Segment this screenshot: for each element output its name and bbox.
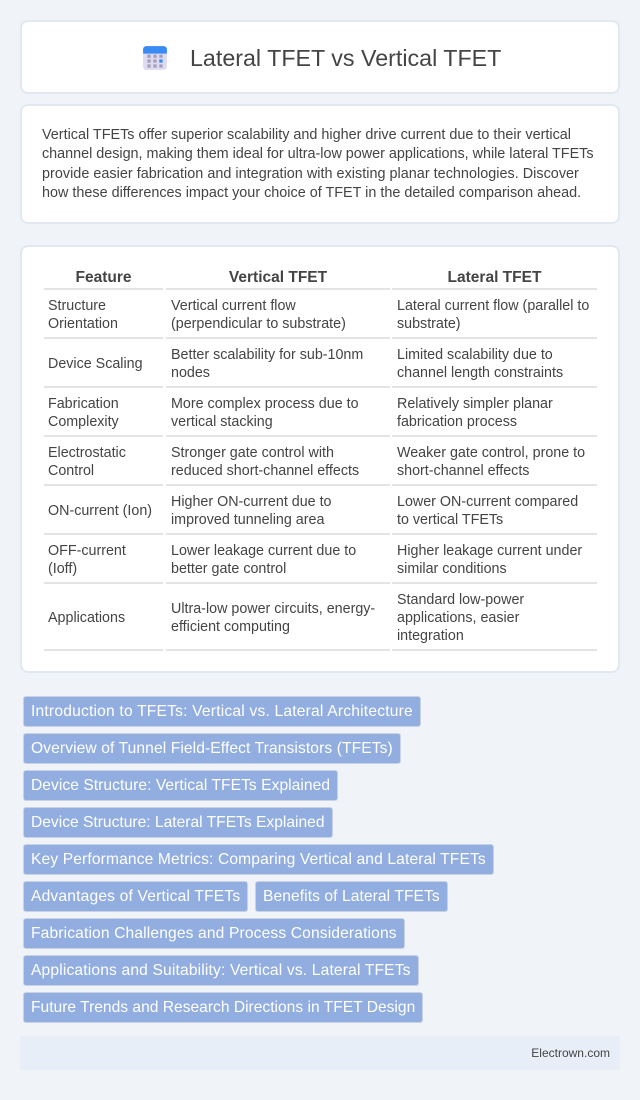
row: electrostatic control: short-channel effects: [397, 462, 529, 478]
row: fabrication complexity: More complex process due to: [171, 396, 359, 412]
row: electrostatic control: Stronger gate control with: [171, 444, 334, 460]
row: on-current: Lower ON-current compared: [397, 494, 578, 510]
row: fabrication complexity: Complexity: [48, 414, 119, 430]
footer source text: Electrown.com: [531, 1046, 610, 1060]
row: off-current: [44, 542, 597, 584]
tag: performance metrics: Key Performance Metrics: Comparing Vertical and Lateral TFETs: [31, 851, 486, 868]
row: device scaling: [44, 346, 597, 388]
row: structure orientation: Vertical current flow: [171, 298, 296, 314]
tag: introduction: Introduction to TFETs: Vertical vs. Lateral Architecture: [31, 703, 413, 720]
table header row: Feature: [76, 269, 132, 286]
tag: future trends: Future Trends and Research Directions in TFET Design: [31, 999, 415, 1016]
row: fabrication complexity: Fabrication: [48, 396, 119, 412]
row: fabrication complexity: Relatively simpler planar: [397, 396, 553, 412]
row: structure orientation: substrate): [397, 316, 461, 332]
row: off-current: better gate control: [171, 560, 286, 576]
intro line 3: provide easier fabrication and integration with existing planar technologies. Discover: [42, 166, 579, 182]
row: structure orientation: Orientation: [48, 316, 118, 332]
tag: vertical structure: Device Structure: Vertical TFETs Explained: [31, 777, 330, 794]
row: structure orientation: Structure: [48, 298, 106, 314]
footer bar: [20, 1036, 620, 1070]
tag: benefits: Benefits of Lateral TFETs: [263, 888, 440, 905]
intro text panel: [20, 104, 620, 224]
row: structure orientation: [44, 298, 597, 339]
tag: lateral structure: [23, 807, 333, 838]
row: off-current: Higher leakage current under: [397, 542, 582, 558]
row: off-current: similar conditions: [397, 560, 507, 576]
row: device scaling: Device Scaling: [48, 356, 143, 372]
row: applications: [44, 592, 597, 651]
row: device scaling: nodes: [171, 364, 210, 380]
row: off-current: OFF-current: [48, 542, 126, 558]
icon: calendar grid: [143, 46, 167, 70]
tag: benefits: [255, 881, 448, 912]
tag: overview: [23, 733, 401, 764]
row: electrostatic control: [44, 444, 597, 486]
row: structure orientation: (perpendicular to substrate): [171, 316, 346, 332]
tag: fabrication challenges: Fabrication Challenges and Process Considerations: [31, 925, 397, 942]
tag: vertical structure: [23, 770, 338, 801]
tag: advantages: [23, 881, 248, 912]
row: structure orientation: Lateral current flow (parallel to: [397, 298, 589, 314]
row: fabrication complexity: vertical stacking: [171, 414, 273, 430]
tag: future trends: [23, 992, 423, 1023]
row: on-current: to vertical TFETs: [397, 512, 503, 528]
row: applications: Standard low-power: [397, 592, 524, 608]
row: electrostatic control: reduced short-channel effects: [171, 462, 359, 478]
row: device scaling: Limited scalability due to: [397, 346, 553, 362]
row: on-current: Higher ON-current due to: [171, 494, 332, 510]
row: fabrication complexity: [44, 396, 597, 437]
row: electrostatic control: Weaker gate control, prone to: [397, 444, 585, 460]
header panel: [20, 20, 620, 94]
tag: overview: Overview of Tunnel Field-Effect Transistors (TFETs): [31, 740, 393, 757]
intro line 2: channel design, making them ideal for ultra-low power applications, while lateral TFETs: [42, 146, 594, 162]
comparison table panel: [20, 245, 620, 673]
row: applications: Applications: [48, 610, 125, 626]
tag: lateral structure: Device Structure: Lateral TFETs Explained: [31, 814, 325, 831]
row: electrostatic control: Control: [48, 462, 94, 478]
table header row: Vertical TFET: [229, 269, 327, 286]
tag list: section links: [23, 696, 494, 1023]
intro line 1: Vertical TFETs offer superior scalability and higher drive current due to their vertical: [42, 127, 571, 143]
tag: introduction: [23, 696, 421, 727]
row: fabrication complexity: fabrication process: [397, 414, 517, 430]
tag: fabrication challenges: [23, 918, 405, 949]
table header row: Lateral TFET: [448, 269, 541, 286]
row: applications: integration: [397, 628, 464, 644]
tag: performance metrics: [23, 844, 494, 875]
intro line 4: how these differences impact your choice of TFET in the detailed comparison ahead.: [42, 185, 581, 201]
tag: applications: [23, 955, 419, 986]
row: applications: efficient computing: [171, 618, 290, 634]
row: on-current: improved tunneling area: [171, 512, 324, 528]
tag: applications: Applications and Suitability: Vertical vs. Lateral TFETs: [31, 962, 411, 979]
row: device scaling: channel length constraints: [397, 364, 563, 380]
title: Lateral TFET vs Vertical TFET: [190, 45, 501, 71]
tag: advantages: Advantages of Vertical TFETs: [31, 888, 240, 905]
row: on-current: ON-current (Ion): [48, 502, 152, 518]
row: device scaling: Better scalability for sub-10nm: [171, 346, 363, 362]
row: off-current: (Ioff): [48, 560, 77, 576]
row: applications: Ultra-low power circuits, energy-: [171, 600, 375, 616]
row: electrostatic control: Electrostatic: [48, 444, 126, 460]
row: applications: applications, easier: [397, 610, 519, 626]
row: off-current: Lower leakage current due to: [171, 542, 356, 558]
row: on-current: [44, 494, 597, 535]
table header row: [44, 269, 597, 290]
